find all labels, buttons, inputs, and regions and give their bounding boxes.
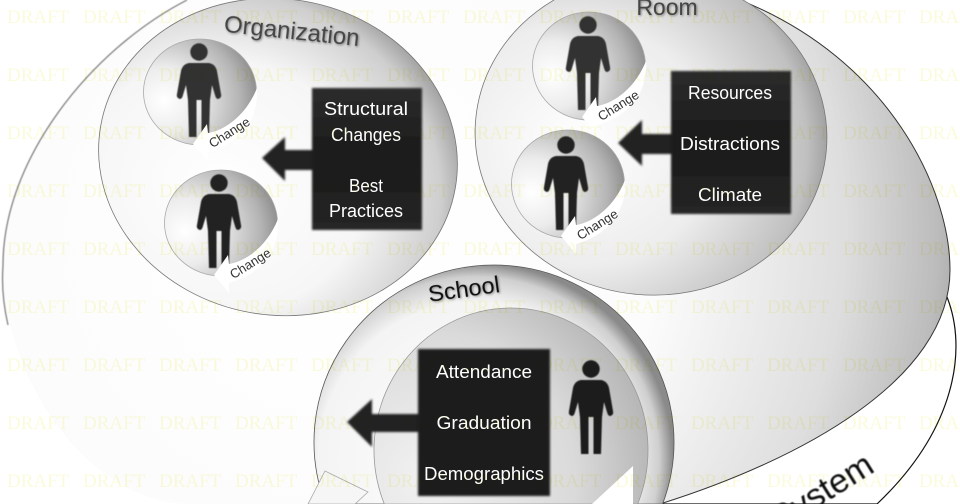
arrow: attendance to student	[347, 399, 422, 447]
watermark grid: DRAFT DRAFT DRAFT DRAFT DRAFT DRAFT DRAFT DRAFT DRAFT DRAFT DRAFT DRAFT DRAFT	[7, 181, 960, 202]
person sphere 1	[144, 39, 257, 162]
panel: school	[314, 265, 674, 504]
school inner sphere	[374, 308, 648, 504]
watermark grid: DRAFT DRAFT DRAFT DRAFT DRAFT DRAFT DRAFT DRAFT DRAFT DRAFT DRAFT DRAFT DRAFT	[7, 471, 960, 492]
arrow: structural changes to people	[262, 137, 316, 181]
person sphere 4: Change	[574, 206, 621, 243]
box: resources, distractions, climate: Resources	[688, 83, 772, 103]
box: attendance, graduation, demographics	[418, 349, 550, 496]
box: resources, distractions, climate: Climate	[698, 185, 762, 205]
organization heading: Organization	[223, 11, 361, 52]
person sphere 2: Change	[227, 245, 274, 282]
arrow: resources to people	[618, 120, 675, 166]
box: attendance, graduation, demographics: Attendance	[436, 362, 532, 382]
box: structural changes and best practices: Structural	[324, 99, 408, 119]
panel: organization	[73, 0, 483, 344]
box: structural changes and best practices: Best	[349, 176, 383, 196]
outer white ribbon: system	[640, 290, 956, 504]
organization sphere	[73, 0, 483, 344]
box: attendance, graduation, demographics: Graduation	[436, 413, 532, 433]
panel: room	[462, 0, 840, 310]
room sphere	[462, 0, 840, 310]
watermark grid: DRAFT DRAFT DRAFT DRAFT DRAFT DRAFT DRAFT DRAFT DRAFT DRAFT DRAFT DRAFT DRAFT	[7, 355, 960, 376]
watermark grid: DRAFT DRAFT DRAFT DRAFT DRAFT DRAFT DRAFT DRAFT DRAFT DRAFT DRAFT DRAFT DRAFT	[7, 7, 960, 28]
arrow: bottom left	[308, 471, 368, 504]
person sphere 4	[512, 130, 625, 254]
box: structural changes and best practices: Changes	[331, 125, 401, 145]
person sphere 3: Change	[595, 87, 642, 124]
box: structural changes and best practices	[312, 88, 422, 230]
person sphere 3	[532, 12, 646, 135]
box: resources, distractions, climate	[671, 71, 791, 214]
watermark grid: DRAFT DRAFT DRAFT DRAFT DRAFT DRAFT DRAFT DRAFT DRAFT DRAFT DRAFT DRAFT DRAFT	[7, 239, 960, 260]
watermark grid: DRAFT DRAFT DRAFT DRAFT DRAFT DRAFT DRAFT DRAFT DRAFT DRAFT DRAFT DRAFT DRAFT	[7, 413, 960, 434]
box: resources, distractions, climate: Distractions	[680, 134, 780, 154]
box: attendance, graduation, demographics: Demographics	[424, 464, 544, 484]
box: structural changes and best practices: Practices	[329, 201, 403, 221]
watermark grid: DRAFT DRAFT DRAFT DRAFT DRAFT DRAFT DRAFT DRAFT DRAFT DRAFT DRAFT DRAFT DRAFT	[7, 297, 960, 318]
school heading: School	[426, 271, 501, 307]
person sphere 2	[164, 170, 278, 293]
watermark grid: DRAFT DRAFT DRAFT DRAFT DRAFT DRAFT DRAFT DRAFT DRAFT DRAFT DRAFT DRAFT DRAFT	[7, 123, 960, 144]
arrow: bottom right	[592, 466, 633, 504]
school sphere	[314, 265, 674, 504]
watermark grid: DRAFT DRAFT DRAFT DRAFT DRAFT DRAFT DRAFT DRAFT DRAFT DRAFT DRAFT DRAFT DRAFT	[7, 65, 960, 86]
person sphere 1: Change	[206, 114, 253, 151]
person	[569, 360, 613, 454]
